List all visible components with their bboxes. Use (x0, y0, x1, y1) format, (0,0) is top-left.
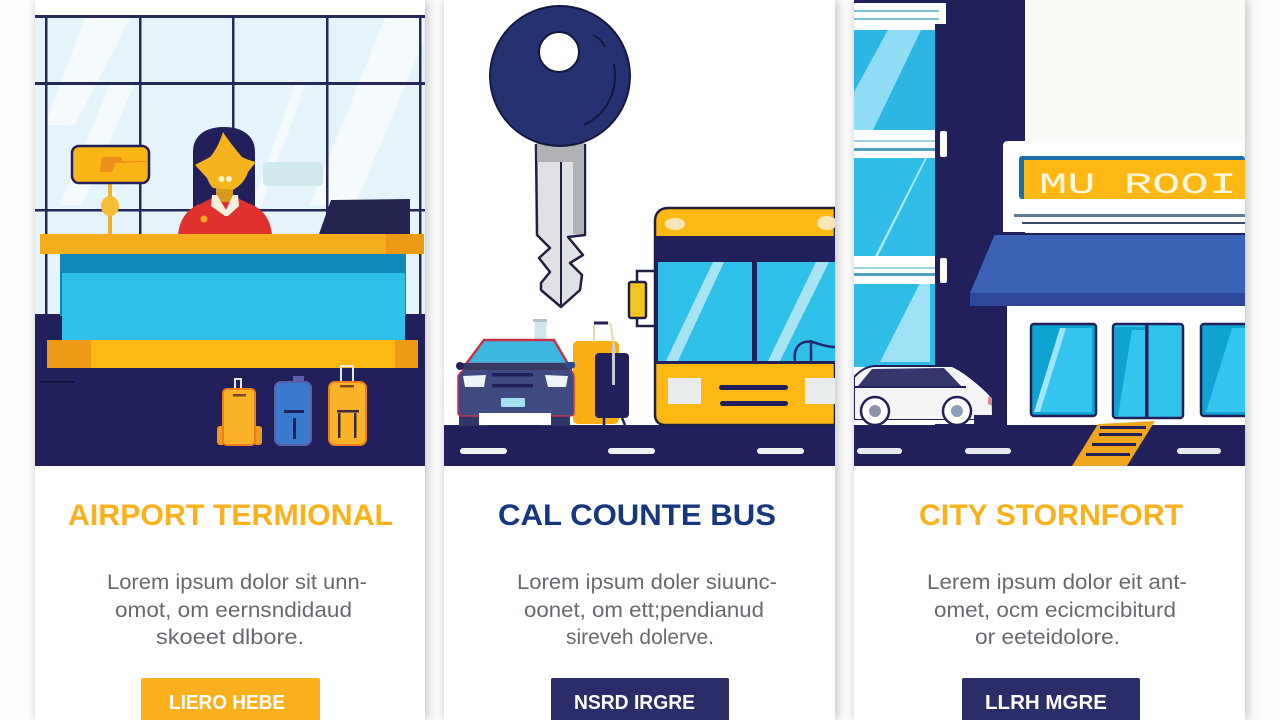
icon: white car (854, 366, 993, 425)
button: LLRH MGRE (985, 692, 1107, 714)
icon: storefront (1007, 306, 1251, 425)
panel: city storefront (854, 0, 1245, 720)
icon: laptop (319, 199, 410, 234)
icon: store sign (1003, 141, 1245, 232)
heading: CAL COUNTE BUS (498, 499, 776, 532)
icon: glass building (854, 3, 947, 367)
button (551, 678, 729, 720)
text block: or eeteidolore. (975, 626, 1120, 649)
icon: floor (35, 314, 425, 466)
icon: bus (629, 208, 837, 425)
button (141, 678, 320, 720)
panel: airport terminal (35, 0, 425, 720)
icon: car (456, 319, 575, 426)
text block (927, 571, 1187, 649)
illustration: key, car and bus (444, 6, 837, 466)
text block: Lorem ipsum doler siuunc- (517, 571, 777, 594)
icon: luggage (573, 323, 629, 425)
heading: AIRPORT TERMIONAL (68, 499, 393, 532)
button: NSRD IRGRE (574, 692, 695, 714)
button: LIERO HEBE (169, 692, 285, 714)
icon: key (490, 6, 630, 307)
illustration: airport check-in desk (35, 15, 425, 466)
text block: sireveh dolerve. (566, 626, 714, 649)
icon: awning (970, 233, 1245, 306)
illustration: city street and storefront (854, 0, 1251, 466)
text block: omet, ocm ecicmcibiturd (934, 599, 1176, 622)
text block (517, 571, 777, 649)
icon: tall yellow suitcase (329, 366, 366, 445)
icon: desk sign (72, 146, 149, 235)
icon: store sign: MU ROOI (1039, 169, 1237, 203)
text block: oonet, om ett;pendianud (524, 599, 764, 622)
text block: omot, om eernsndidaud (115, 599, 352, 622)
icon: road with crosswalk (854, 421, 1245, 466)
icon: receptionist (178, 127, 272, 234)
button (962, 678, 1140, 720)
icon: road (444, 425, 835, 466)
text block: Lerem ipsum dolor eit ant- (927, 571, 1187, 594)
icon: blue suitcase (275, 376, 311, 445)
icon: counter (40, 234, 424, 368)
panel: car and bus (444, 0, 835, 720)
text block (107, 571, 367, 649)
icon: dark tower (935, 0, 1025, 426)
text block: skoeet dlbore. (156, 626, 304, 649)
heading: CITY STORNFORT (919, 499, 1183, 532)
icon: yellow suitcase with wheels (217, 379, 262, 445)
text block: Lorem ipsum dolor sit unn- (107, 571, 367, 594)
